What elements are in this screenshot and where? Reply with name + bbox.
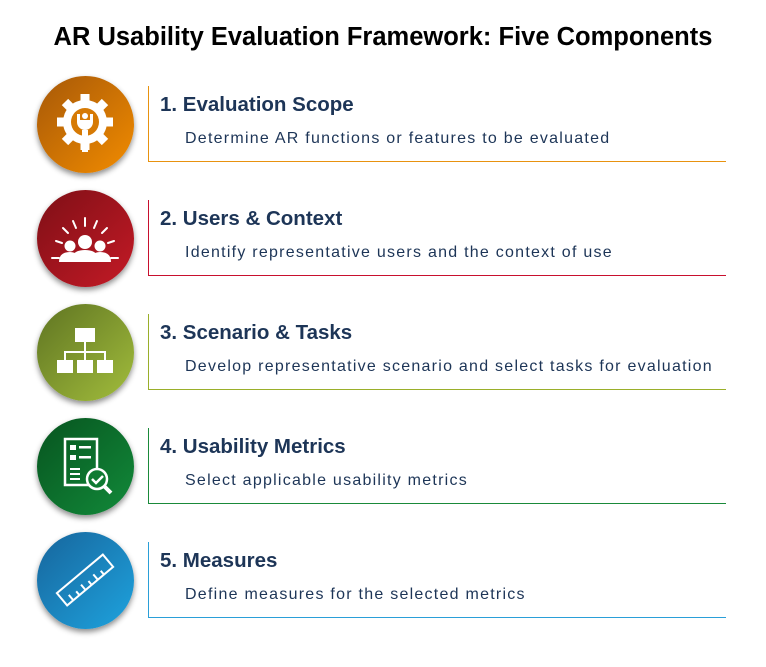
card 1: Determine AR functions or features to be evaluated — [185, 130, 610, 147]
card 1 — [148, 86, 726, 162]
card 5 — [148, 542, 726, 618]
card 5: Define measures for the selected metrics — [185, 586, 526, 603]
row 4: usability metrics — [33, 417, 726, 522]
row 1: evaluation scope — [33, 75, 726, 180]
row 2: users & context — [33, 189, 726, 294]
icon: users group — [37, 190, 134, 287]
card 3: Develop representative scenario and select tasks for evaluation — [185, 358, 713, 375]
icon: ruler — [37, 532, 134, 629]
card 3: 3. Scenario & Tasks — [160, 321, 352, 344]
card 4: 4. Usability Metrics — [160, 435, 346, 458]
card 3 — [148, 314, 726, 390]
row 5: measures — [33, 531, 726, 636]
icon: flowchart — [37, 304, 134, 401]
card 2: 2. Users & Context — [160, 207, 342, 230]
card 4 — [148, 428, 726, 504]
title: AR Usability Evaluation Framework: Five Components — [54, 23, 712, 51]
card 2 — [148, 200, 726, 276]
icon: gear with wrench — [37, 76, 134, 173]
row 3: scenario & tasks — [33, 303, 726, 408]
card 5: 5. Measures — [160, 549, 277, 572]
card 2: Identify representative users and the context of use — [185, 244, 613, 261]
card 1: 1. Evaluation Scope — [160, 93, 354, 116]
card 4: Select applicable usability metrics — [185, 472, 468, 489]
icon: checklist with magnifier — [37, 418, 134, 515]
